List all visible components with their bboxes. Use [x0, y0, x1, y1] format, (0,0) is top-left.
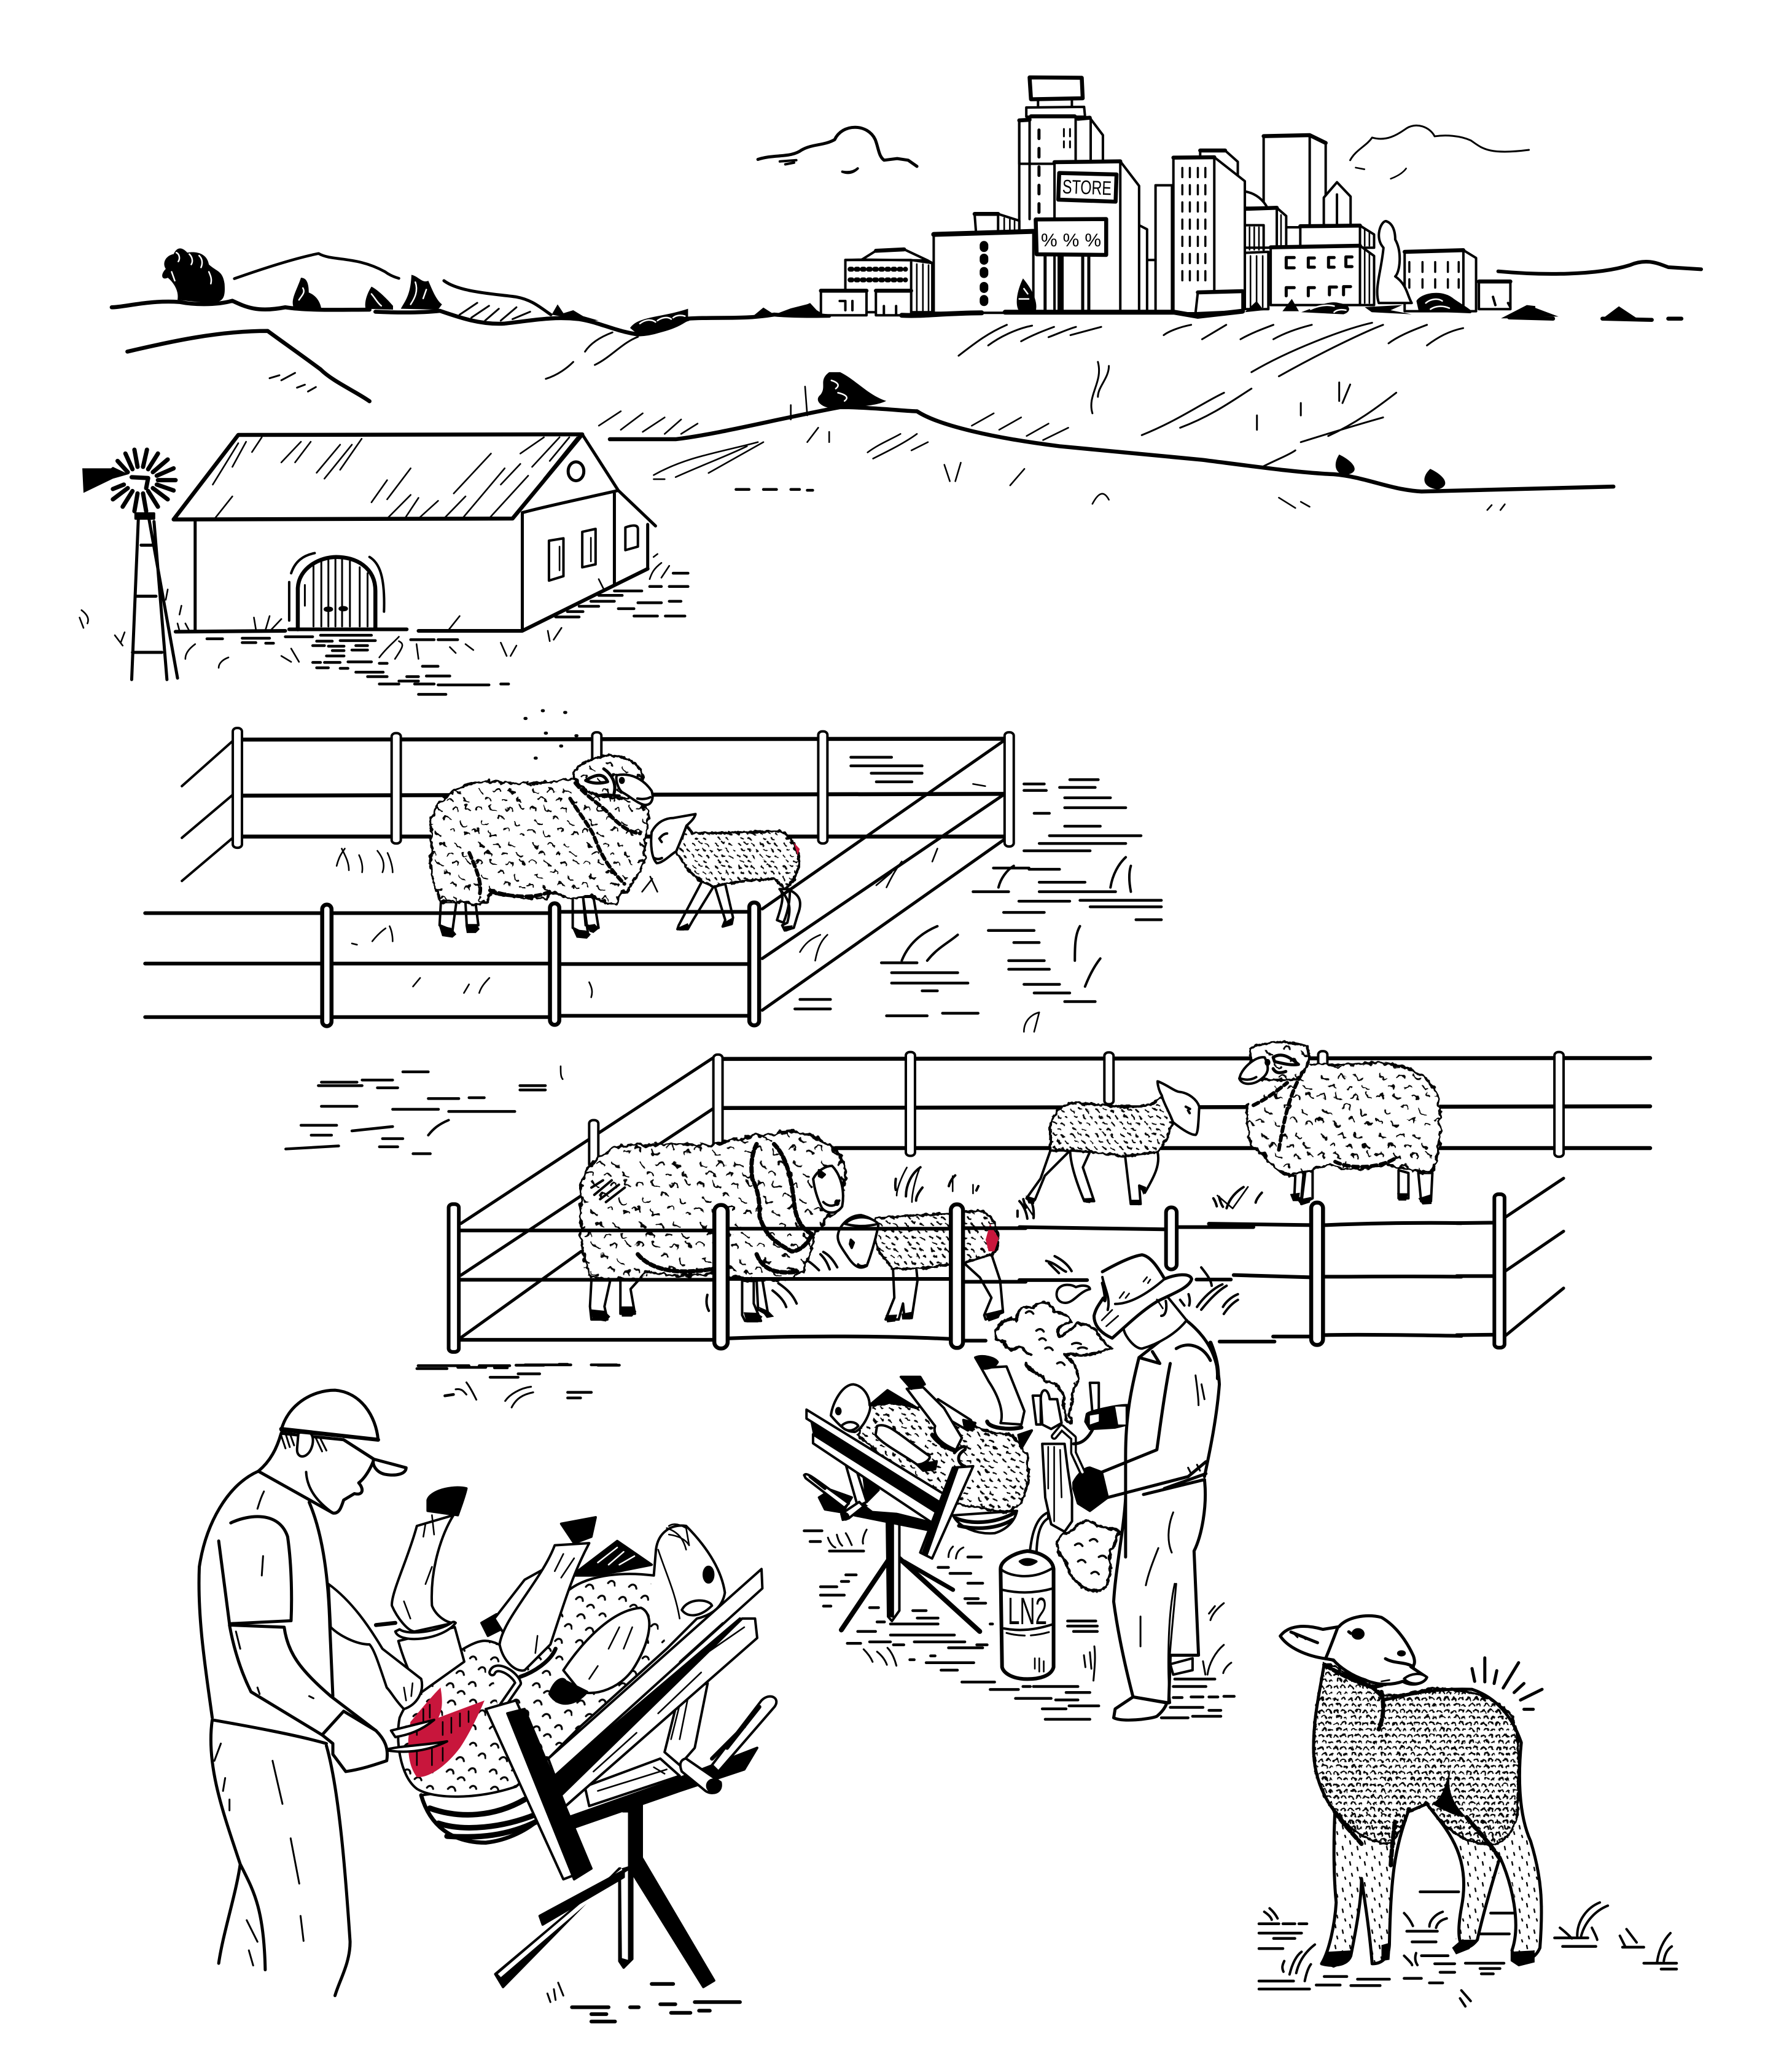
scene: pen two outer posts and right end rails [449, 1178, 1564, 1352]
lower rails and posts [1019, 1203, 1462, 1345]
sheep head [831, 1385, 870, 1432]
ram head and wool cap [574, 756, 653, 805]
man cap and head [259, 1390, 406, 1513]
lamb silhouette and legs [1314, 1664, 1543, 1965]
stand [495, 1804, 714, 1987]
lamb ground marks [1259, 1892, 1677, 2006]
scene: second pen ram and lamb [459, 1131, 1026, 1348]
farmer body [1102, 1320, 1220, 1720]
lamb wool [1314, 1664, 1519, 1865]
pen two back fence [461, 1051, 1650, 1338]
central tall building [1145, 157, 1245, 313]
tall tree [1377, 221, 1412, 303]
sheep hind leg one [376, 1488, 466, 1694]
ram body [580, 1131, 846, 1281]
sheep raised legs [876, 1356, 1032, 1471]
scene: second pen right side with lamb and ram [1019, 1042, 1462, 1345]
man far arm [329, 1584, 422, 1709]
horizon line [112, 301, 688, 335]
lamb legs and body [875, 1211, 1003, 1323]
sheep foreleg with hoof [550, 1608, 649, 1703]
front block with windows [1271, 225, 1374, 305]
main tower [1019, 77, 1103, 232]
LN2 tank [1000, 1551, 1054, 1679]
field hatching [959, 322, 1463, 467]
pen one grass and ground marks [337, 757, 1161, 1032]
grass under ram [707, 1167, 1026, 1311]
shrubs at base of city [798, 278, 1535, 318]
sheep hind leg two [493, 1517, 596, 1711]
store sign text: STORE [1062, 176, 1112, 199]
lamb head [651, 814, 696, 863]
cloud right of city [1350, 125, 1529, 179]
scene: sheep pen fences and ground [182, 711, 1650, 1366]
windmill [82, 450, 177, 679]
lamb hooves [1322, 1940, 1535, 1968]
man sleeve and near arm [219, 1517, 376, 1735]
scene: man treating a sheep with shears [199, 1364, 776, 2022]
pen one right diagonal rails [762, 741, 1003, 1010]
sheep folded foreleg [481, 1569, 548, 1636]
flies above sheep [525, 711, 577, 758]
right small buildings [1404, 250, 1510, 311]
billboard percent text: %%% [1041, 230, 1101, 251]
ram legs [439, 897, 599, 939]
lamb body [676, 826, 800, 889]
scene: liquid nitrogen treatment [804, 1255, 1234, 1720]
front restraint post [486, 1700, 591, 1879]
right rails and diagonal [1457, 1178, 1564, 1335]
scene: right landscape and fields [599, 125, 1701, 510]
barn [80, 434, 688, 694]
hill in middle ground [599, 372, 1613, 510]
city ground line [902, 311, 1242, 316]
lamb hind legs [677, 881, 800, 932]
crank handle [680, 1697, 776, 1793]
cradle boards [548, 1569, 762, 1827]
store building [1054, 162, 1147, 312]
sheep on cradle wool [858, 1390, 1029, 1512]
ram legs [590, 1275, 774, 1323]
ram facing left [1239, 1042, 1440, 1205]
ground around treatment [804, 1530, 1234, 1719]
ground below stand [547, 1983, 740, 2022]
pen one back fence [182, 728, 1014, 881]
horizon and bushes beside city [688, 262, 1701, 320]
vapour plume [995, 1302, 1112, 1423]
percent billboard [1035, 219, 1106, 311]
lamb movement ticks [1472, 1658, 1542, 1710]
treatment post [920, 1466, 973, 1558]
restrained sheep [398, 1524, 725, 1797]
man body [199, 1471, 350, 1996]
low building with small roof box [933, 214, 1034, 313]
first pen front fence [145, 902, 759, 1026]
sling under the sheep [421, 1783, 542, 1843]
lamb head [1280, 1616, 1427, 1684]
shears in hand [322, 1711, 447, 1772]
grass around cowboy [1019, 1187, 1262, 1314]
shrubs on horizon [162, 248, 688, 335]
outer posts [449, 1194, 1505, 1352]
treatment cradle stand [804, 1464, 980, 1632]
small vapour puff near hat [1057, 1285, 1090, 1303]
cloud left of city [758, 127, 917, 173]
scene: first pen ram and lamb [145, 756, 800, 1026]
second pen front fence [459, 1205, 1026, 1348]
scene: city skyline [798, 77, 1535, 318]
nitrogen wand [1029, 1390, 1093, 1563]
ram head [813, 1166, 843, 1213]
farmer hat and head [1094, 1255, 1191, 1348]
distant hills [127, 254, 638, 401]
tank label: LN2 [1008, 1590, 1047, 1633]
walking lamb [1026, 1081, 1199, 1205]
lower vapour cloud [1057, 1521, 1120, 1591]
ram body [430, 778, 649, 905]
left small buildings [821, 249, 932, 315]
treatment sling [953, 1511, 1017, 1533]
scene: left countryside hills [80, 248, 688, 694]
scene: happy lamb [1259, 1616, 1677, 2006]
farmer gloves [1073, 1383, 1127, 1511]
treatment cradle boards [806, 1410, 947, 1523]
red castration wound [408, 1687, 485, 1777]
lamb head [838, 1215, 878, 1267]
pen two grass and ground marks [286, 1066, 1248, 1366]
back towers [1200, 135, 1350, 309]
grass above the cradle [417, 1364, 620, 1407]
